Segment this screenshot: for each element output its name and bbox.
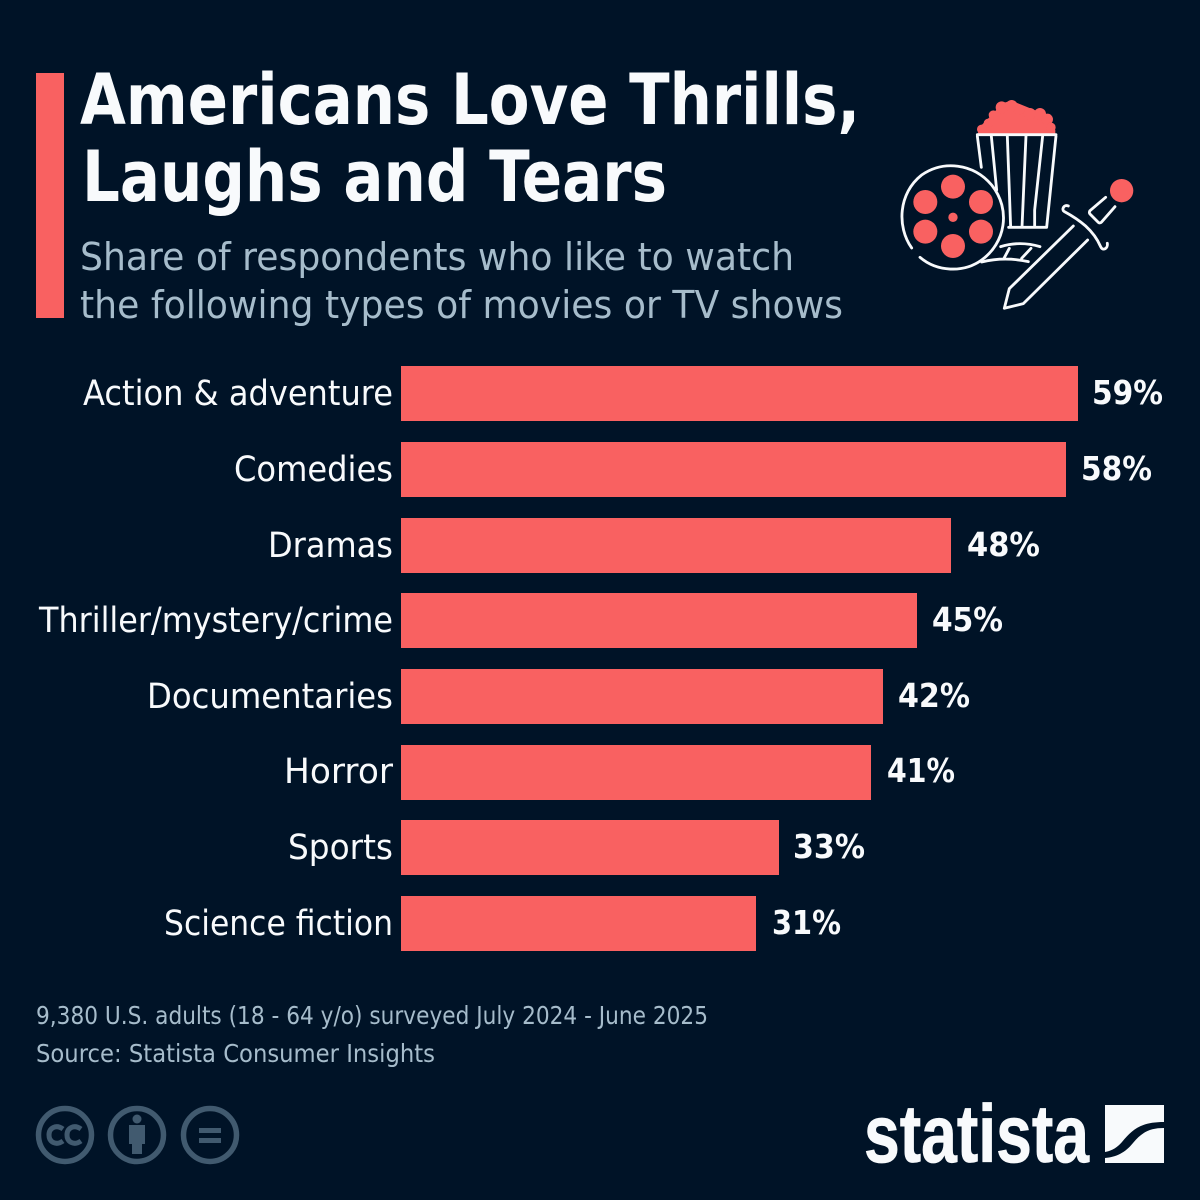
subtitle: the following types of movies or TV shows [80, 283, 843, 327]
title: Americans Love Thrills, [80, 59, 860, 141]
row: Science fiction: Science fiction [164, 904, 393, 944]
row: Dramas: 48% [967, 525, 1040, 564]
bar chart [38, 366, 1163, 951]
row: Dramas [268, 518, 1040, 573]
row: Horror: Horror [284, 752, 394, 792]
row: Action & adventure: 59% [1092, 373, 1163, 412]
row: Sports: 33% [793, 827, 865, 866]
icon: sword [1004, 179, 1133, 308]
accent bar [36, 73, 64, 318]
row: Sports [288, 820, 865, 875]
row: Horror: 41% [887, 751, 955, 790]
icon: film reel, popcorn and sword [902, 100, 1133, 308]
icon: statista mark [1105, 1105, 1164, 1163]
icon: creative commons licence [38, 1108, 236, 1162]
title: Laughs and Tears [82, 136, 667, 218]
row: Comedies [234, 442, 1152, 497]
row: Documentaries: 42% [898, 676, 970, 715]
icon: film reel [902, 166, 1040, 269]
subtitle: Share of respondents who like to watch [80, 235, 794, 279]
subtitle [80, 235, 843, 327]
footnote and source [36, 1001, 708, 1068]
row: Horror [284, 745, 955, 800]
icon: popcorn [977, 100, 1056, 227]
row: Comedies: Comedies [234, 450, 393, 490]
statista logo: statista [864, 1089, 1090, 1180]
row: Documentaries [147, 669, 970, 724]
row: Science fiction: 31% [772, 903, 841, 942]
row: Comedies: 58% [1081, 449, 1152, 488]
row: Thriller/mystery/crime: Thriller/mystery/crime [38, 601, 393, 641]
row: Action & adventure: Action & adventure [83, 374, 393, 414]
row: Documentaries: Documentaries [147, 677, 393, 717]
row: Thriller/mystery/crime [38, 593, 1003, 648]
row: Action & adventure [83, 366, 1163, 421]
footnote and source: 9,380 U.S. adults (18 - 64 y/o) surveyed July 2024 - June 2025 [36, 1001, 708, 1030]
title [80, 59, 860, 218]
footnote and source: Source: Statista Consumer Insights [36, 1039, 435, 1068]
row: Sports: Sports [288, 828, 393, 868]
row: Thriller/mystery/crime: 45% [932, 600, 1003, 639]
row: Dramas: Dramas [268, 526, 393, 566]
row: Science fiction [164, 896, 841, 951]
